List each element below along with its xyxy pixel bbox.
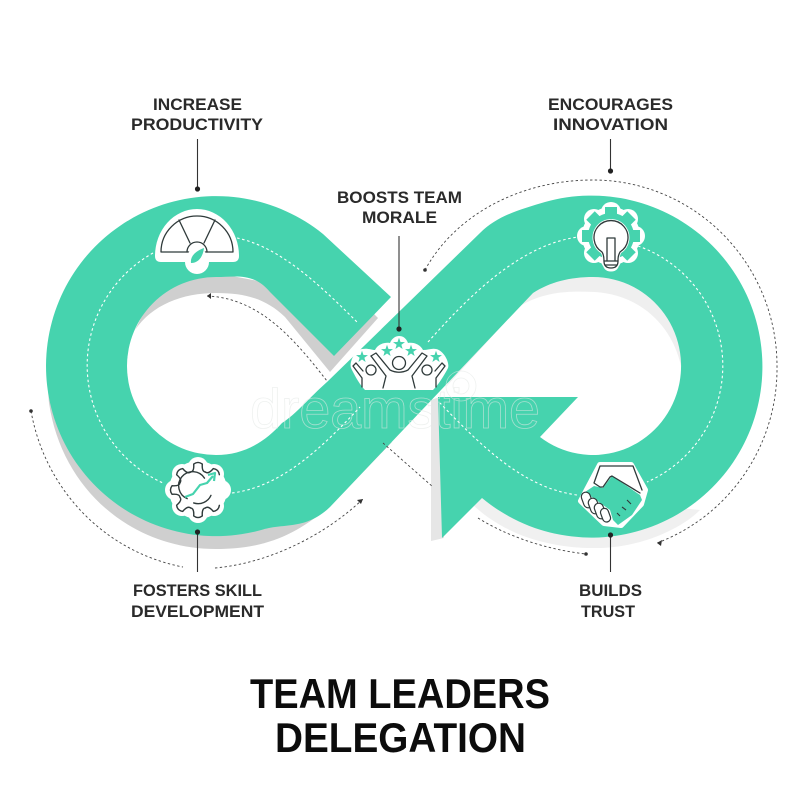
label: boosts team morale: MORALE (362, 208, 437, 227)
teal gear (582, 207, 640, 261)
gear outline teeth (170, 462, 221, 518)
stars (356, 338, 442, 362)
label: boosts team morale (337, 188, 462, 227)
label: fosters skill development (131, 581, 265, 621)
icon: light bulb with gear (577, 202, 645, 270)
icon: handshake (580, 465, 645, 525)
white gear silhouette (577, 202, 645, 270)
white dashed centre lines (87, 237, 723, 495)
watermark: dreamstime (250, 377, 540, 440)
people outlines (353, 353, 445, 388)
gear white blob (165, 457, 231, 523)
infinity arrow 3D shadow (47, 250, 700, 549)
label: encourages innovation: ENCOURAGES (548, 95, 673, 114)
leader line: boosts team morale (396, 236, 402, 332)
leader line: encourages innovation (608, 139, 613, 174)
black dotted flow arcs (29, 180, 777, 568)
leader line: builds trust (608, 532, 613, 572)
title: DELEGATION (275, 714, 526, 761)
leader line: increase productivity (195, 139, 200, 192)
leader line: fosters skill development (195, 529, 200, 572)
label: increase productivity: INCREASE (153, 95, 242, 114)
label: increase productivity (131, 95, 264, 134)
title (250, 670, 550, 761)
label: builds trust (579, 581, 642, 621)
label: encourages innovation (548, 95, 673, 134)
label: builds trust: TRUST (581, 602, 636, 621)
icon: team with stars (351, 336, 448, 390)
label: increase productivity: PRODUCTIVITY (131, 115, 264, 134)
label: boosts team morale: BOOSTS TEAM (337, 188, 462, 207)
label: fosters skill development: FOSTERS SKILL (133, 581, 262, 600)
label: encourages innovation: INNOVATION (553, 115, 668, 134)
title: TEAM LEADERS (250, 670, 550, 717)
label: builds trust: BUILDS (579, 581, 642, 600)
infinity arrow band (46, 196, 762, 538)
label: fosters skill development: DEVELOPMENT (131, 602, 265, 621)
icon: gauge (155, 209, 239, 274)
icon: gear with growth arrow (165, 457, 231, 523)
fingers (580, 491, 612, 523)
